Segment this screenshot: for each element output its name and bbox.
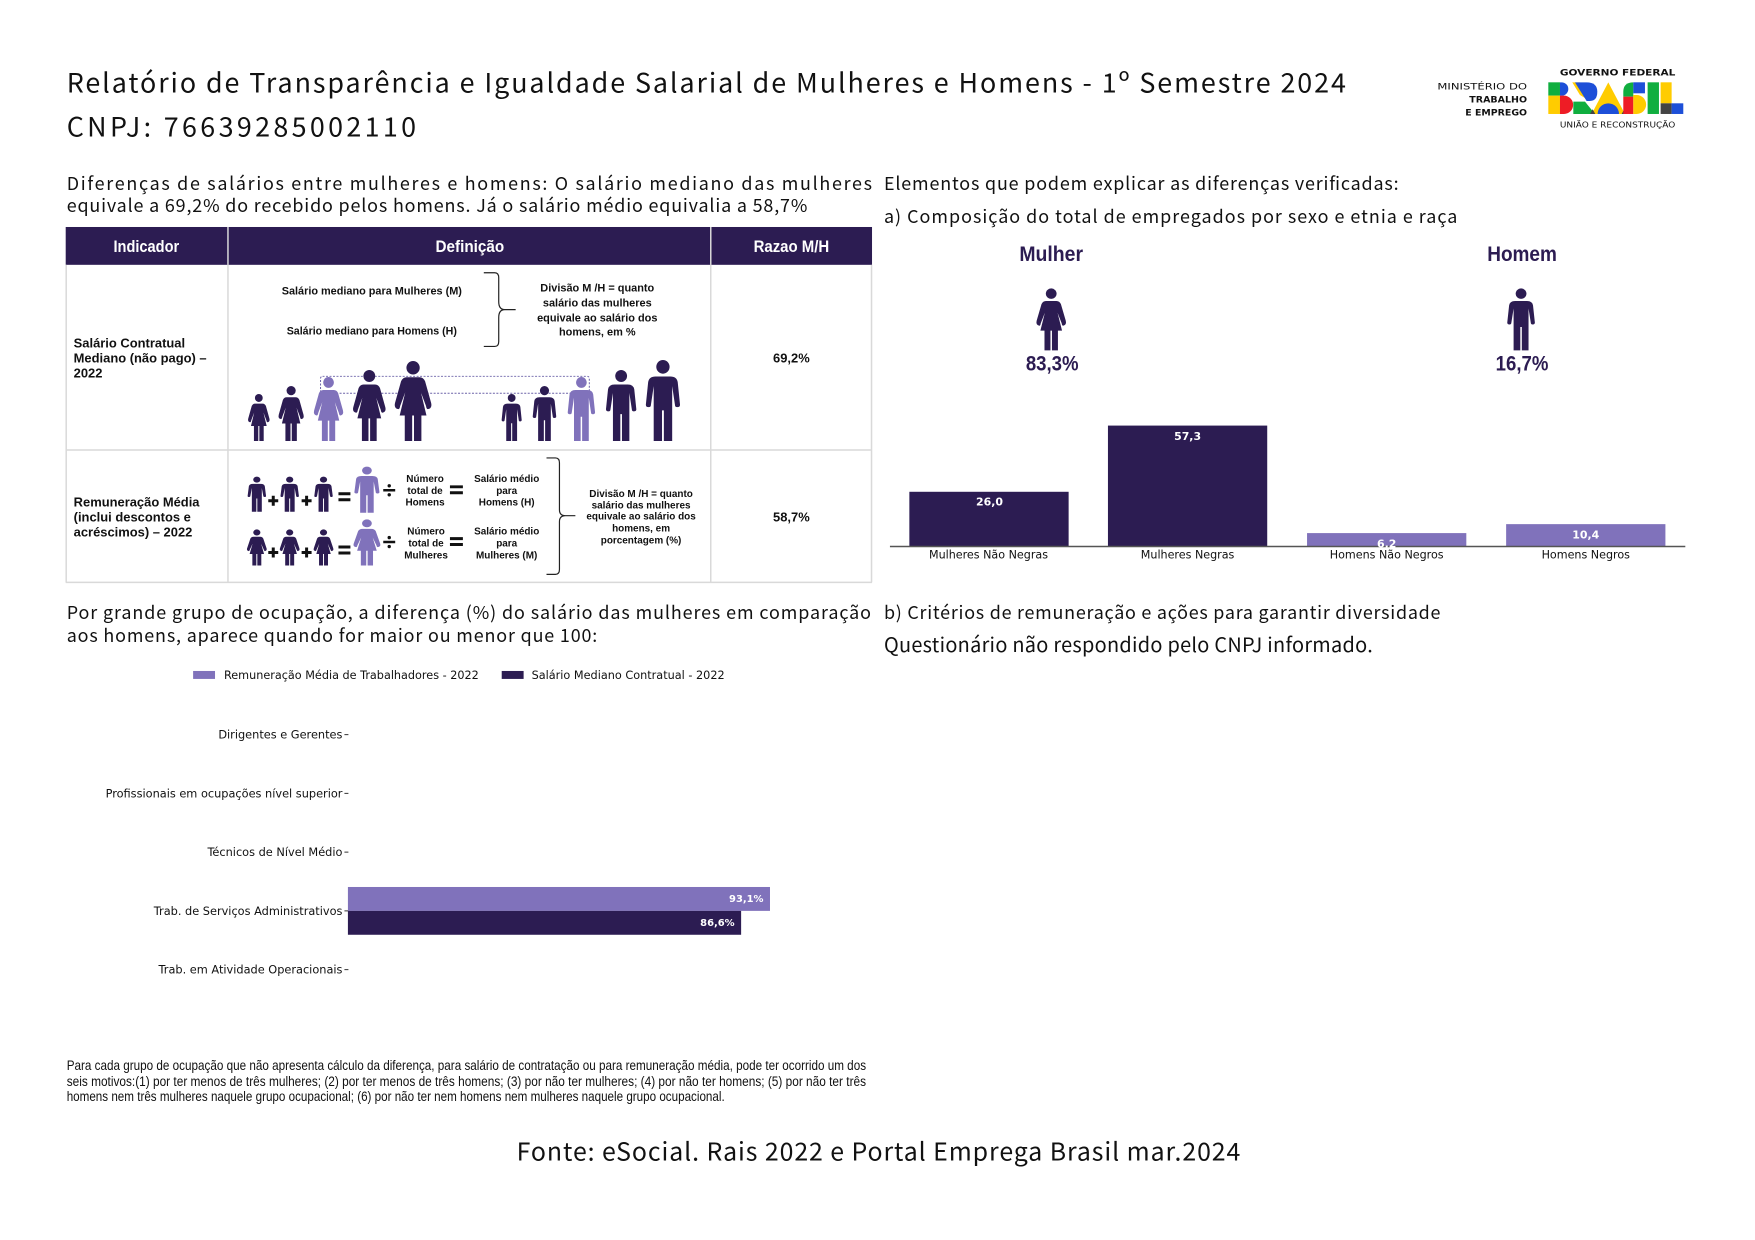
text: por grande grupo de ocupação <box>67 599 871 648</box>
legend: grouped bar chart: Remuneração Média de Trabalhadores - 2022 <box>224 668 479 682</box>
row 2: remuneração média: acréscimos) – 2022 <box>74 525 192 540</box>
logo: ministério and governo federal: UNIÃO E RECONSTRUÇÃO <box>1560 119 1675 129</box>
row 2: remuneração média: total de <box>407 486 443 497</box>
row 1: salário contratual mediano <box>74 273 810 441</box>
row 2: remuneração média: Número <box>406 474 444 485</box>
logo: ministério and governo federal: MINISTÉRIO DO <box>1437 81 1527 93</box>
category labels: Trab. em Atividade Operacionais <box>158 963 343 977</box>
brasil wordmark <box>1548 82 1683 114</box>
row 1: salário contratual mediano: salário das mulheres <box>543 298 652 310</box>
bars <box>348 887 770 935</box>
chart: composition by sex and race: 10,4 <box>1572 529 1600 542</box>
bars: 93,1% <box>729 894 764 905</box>
text: critérios de remuneração: b) Critérios de remuneração e ações para garantir diversidade <box>884 599 1441 625</box>
row 2: remuneração média: salário das mulheres <box>592 501 691 512</box>
category labels: Profissionais em ocupações nível superior <box>106 786 343 800</box>
row 2: remuneração média: Mulheres (M) <box>476 550 537 561</box>
row 1: salário contratual mediano: equivale ao salário dos <box>537 313 657 325</box>
row 2: remuneração média: Homens (H) <box>479 498 535 509</box>
table header: Definição <box>436 237 504 256</box>
text: por grande grupo de ocupação: aos homens, aparece quando for maior ou menor que 100: <box>67 622 597 648</box>
chart: composition by sex and race: Mulheres Negras <box>1141 548 1235 561</box>
chart: composition by sex and race: 6,2 <box>1377 538 1396 551</box>
row 2: remuneração média: para <box>496 539 518 550</box>
row 2: remuneração média: (inclui descontos e <box>74 510 191 525</box>
source line: Fonte: eSocial. Rais 2022 e Portal Emprega Brasil mar.2024 <box>517 1133 1241 1169</box>
panel: mulher: 83,3% <box>1026 352 1079 375</box>
row 1: salário contratual mediano: Mediano (não pago) – <box>74 350 207 365</box>
legend: grouped bar chart <box>193 668 725 682</box>
chart: composition by sex and race: Homens Não Negros <box>1330 548 1444 561</box>
bars: 86,6% <box>700 918 735 929</box>
chart: composition by sex and race: Mulheres Não Negras <box>929 548 1048 561</box>
panel: homem: 16,7% <box>1496 352 1549 375</box>
row 2: remuneração média: Número <box>407 527 445 538</box>
row 1: salário contratual mediano: 2022 <box>74 365 102 380</box>
row 1: salário contratual mediano: 69,2% <box>773 350 810 365</box>
table header <box>66 227 872 265</box>
row 2: remuneração média: 58,7% <box>773 510 810 525</box>
row 2: remuneração média <box>74 458 810 574</box>
text: elementos que podem explicar: Elementos que podem explicar as diferenças verificadas: <box>884 170 1399 196</box>
logo: ministério and governo federal: E EMPREGO <box>1465 108 1527 118</box>
row 1: salário contratual mediano: Salário Contratual <box>74 335 185 350</box>
title: Relatório de Transparência e Igualdade Salarial de Mulheres e Homens - 1º Semestre 2024 <box>67 62 1346 101</box>
row 2: remuneração média: homens, em <box>612 524 670 535</box>
category labels: Dirigentes e Gerentes <box>218 728 343 742</box>
table: indicadores <box>66 227 872 582</box>
footnote: homens nem três mulheres naquele grupo ocupacional; (6) por não ter nem homens nem mulheres naquele grupo ocupacional. <box>67 1089 725 1104</box>
category labels: Técnicos de Nível Médio <box>206 845 343 859</box>
row 1: salário contratual mediano: Divisão M /H = quanto <box>540 283 655 295</box>
footnote: seis motivos:(1) por ter menos de três mulheres; (2) por ter menos de três homens; (3) por não ter mulheres; (4) por não ter homens; (5) por não ter três <box>67 1074 866 1089</box>
text: diferenças de salários: Diferenças de salários entre mulheres e homens: O salário mediano das mulheres <box>67 170 872 196</box>
row 1: salário contratual mediano: Salário mediano para Homens (H) <box>287 326 457 338</box>
category labels: Trab. de Serviços Administrativos <box>153 904 343 918</box>
row 2: remuneração média: total de <box>408 539 444 550</box>
row 2: remuneração média: Divisão M /H = quanto <box>589 489 693 500</box>
row 2: remuneração média: porcentagem (%) <box>601 536 681 547</box>
text: critérios de remuneração <box>884 599 1441 658</box>
text: diferenças de salários: equivale a 69,2% do recebido pelos homens. Já o salário médio equivalia a 58,7% <box>67 192 807 218</box>
chart: occupational group differences <box>106 728 770 977</box>
row 2: remuneração média: Homens <box>405 498 445 509</box>
row 2: remuneração média: Remuneração Média <box>74 495 200 510</box>
logo: ministério and governo federal: TRABALHO <box>1469 96 1527 106</box>
logo: ministério and governo federal: GOVERNO FEDERAL <box>1560 69 1676 79</box>
text: elementos que podem explicar: a) Composição do total de empregados por sexo e etnia e raça <box>884 203 1457 229</box>
row 1: salário contratual mediano: homens, em % <box>559 326 636 338</box>
table header: Indicador <box>113 237 180 256</box>
text: critérios de remuneração: Questionário não respondido pelo CNPJ informado. <box>884 629 1373 658</box>
table grid <box>66 265 872 582</box>
panel: mulher <box>1019 243 1083 375</box>
row 2: remuneração média: equivale ao salário dos <box>586 512 696 523</box>
title <box>67 62 1346 144</box>
table header: Razao M/H <box>754 237 829 256</box>
chart: composition by sex and race: 57,3 <box>1174 430 1201 443</box>
panel: homem <box>1487 243 1557 375</box>
footnote: Para cada grupo de ocupação que não apresenta cálculo da diferença, para salário de contratação ou para remuneração média, pode ter ocorrido um dos <box>67 1058 866 1073</box>
panel: homem: Homem <box>1487 243 1557 266</box>
row 2: remuneração média: Mulheres <box>404 550 448 561</box>
text: por grande grupo de ocupação: Por grande grupo de ocupação, a diferença (%) do salário das mulheres em comparação <box>67 599 871 625</box>
panel: mulher: Mulher <box>1019 243 1083 266</box>
row 2: remuneração média: Salário médio <box>474 474 539 485</box>
row 2: remuneração média: Salário médio <box>474 527 539 538</box>
footnote <box>67 1058 866 1104</box>
text: elementos que podem explicar <box>884 170 1457 229</box>
chart: composition by sex and race: Homens Negros <box>1542 548 1630 561</box>
row 1: salário contratual mediano: Salário mediano para Mulheres (M) <box>282 286 462 298</box>
row 2: remuneração média: para <box>496 486 518 497</box>
legend: grouped bar chart: Salário Mediano Contratual - 2022 <box>532 668 725 682</box>
logo: ministério and governo federal <box>1437 69 1683 129</box>
chart: composition by sex and race: 26,0 <box>976 496 1003 509</box>
category labels <box>106 728 348 977</box>
title: CNPJ: 76639285002110 <box>67 105 416 144</box>
text: diferenças de salários <box>67 170 872 218</box>
chart: composition by sex and race <box>890 426 1685 561</box>
